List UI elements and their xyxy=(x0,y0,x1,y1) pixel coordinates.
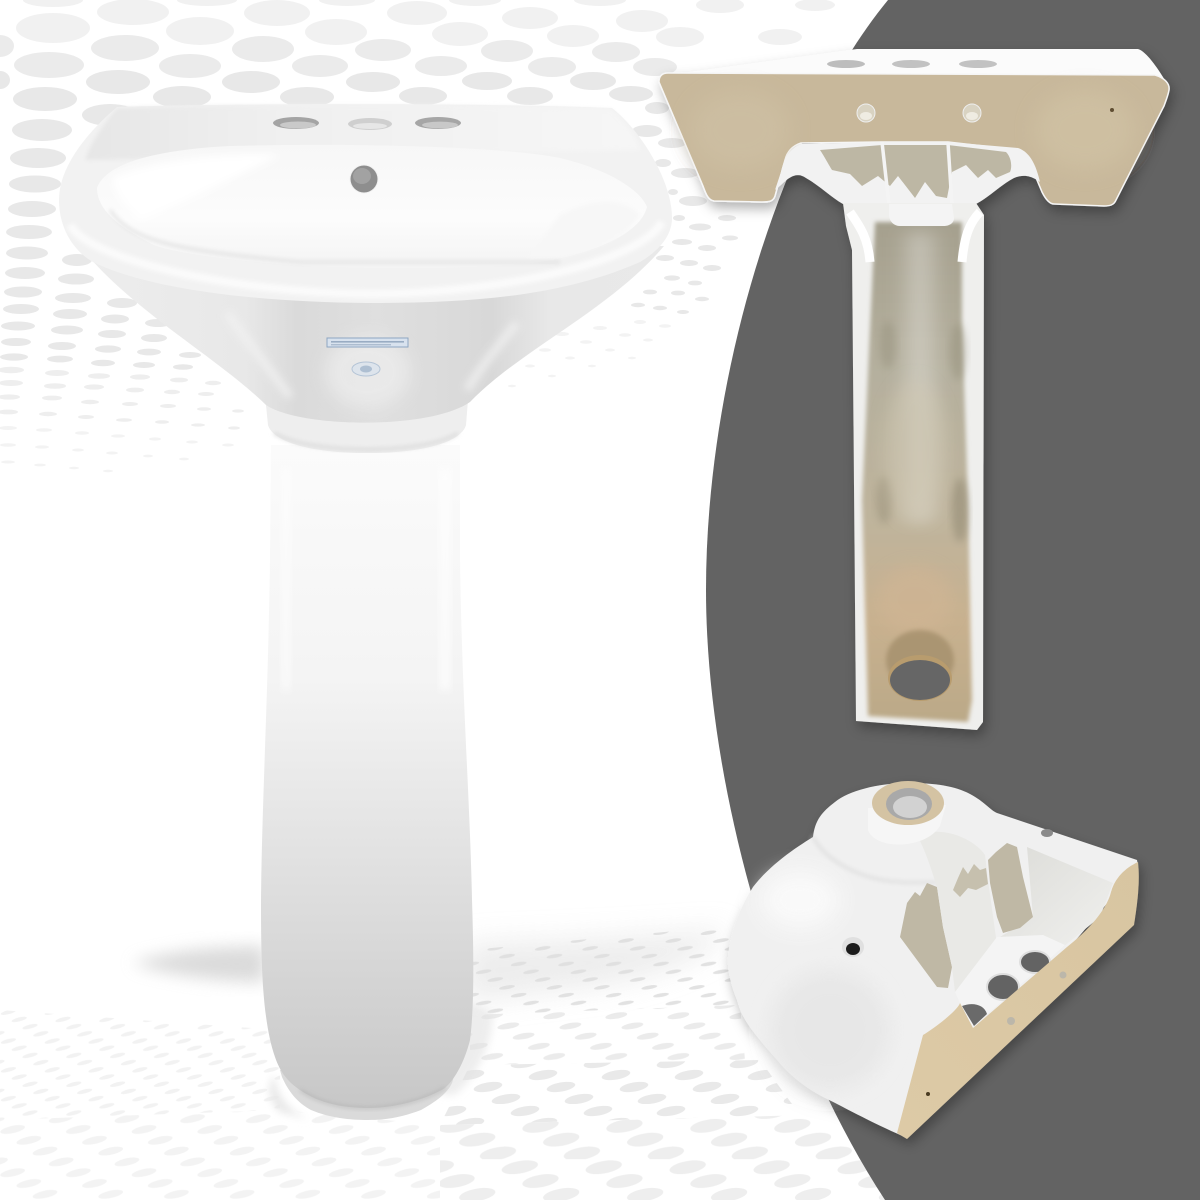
rear tap holes xyxy=(827,60,997,68)
manufacturer label xyxy=(327,338,408,376)
drain cut-out xyxy=(886,630,954,701)
underside view of sink xyxy=(659,49,1169,730)
mounting dimples xyxy=(857,104,1114,122)
rear white lip xyxy=(668,49,1169,87)
column walls xyxy=(843,203,984,730)
basin underside xyxy=(90,246,664,423)
pedestal collar xyxy=(266,400,468,453)
basin deck xyxy=(85,105,640,160)
basin interior xyxy=(1000,847,1113,947)
pedestal base xyxy=(280,1070,456,1120)
main pedestal sink xyxy=(59,104,672,1120)
beige cut face xyxy=(659,73,1169,206)
basin bowl xyxy=(97,145,647,268)
beige cut face xyxy=(897,862,1139,1139)
arch interior xyxy=(775,142,1040,205)
dotted background bottom xyxy=(0,925,900,1200)
pedestal column xyxy=(261,445,473,1108)
neck tab xyxy=(889,204,954,226)
drain spigot xyxy=(868,781,946,845)
side and corner holes xyxy=(842,829,1053,957)
interior tray xyxy=(955,935,1065,1027)
glaze spill xyxy=(917,832,997,992)
tray holes xyxy=(962,951,1050,1026)
floor shadow xyxy=(132,930,727,1120)
overflow hole xyxy=(350,164,378,194)
basin shell xyxy=(728,783,1138,1138)
inverted basin view xyxy=(728,781,1139,1139)
exposed biscuit patches xyxy=(900,843,1033,988)
grey curved panel xyxy=(706,0,1200,1200)
basin rim xyxy=(59,104,672,303)
dotted background top xyxy=(0,0,835,370)
tap holes xyxy=(273,117,461,130)
column interior xyxy=(862,222,972,722)
